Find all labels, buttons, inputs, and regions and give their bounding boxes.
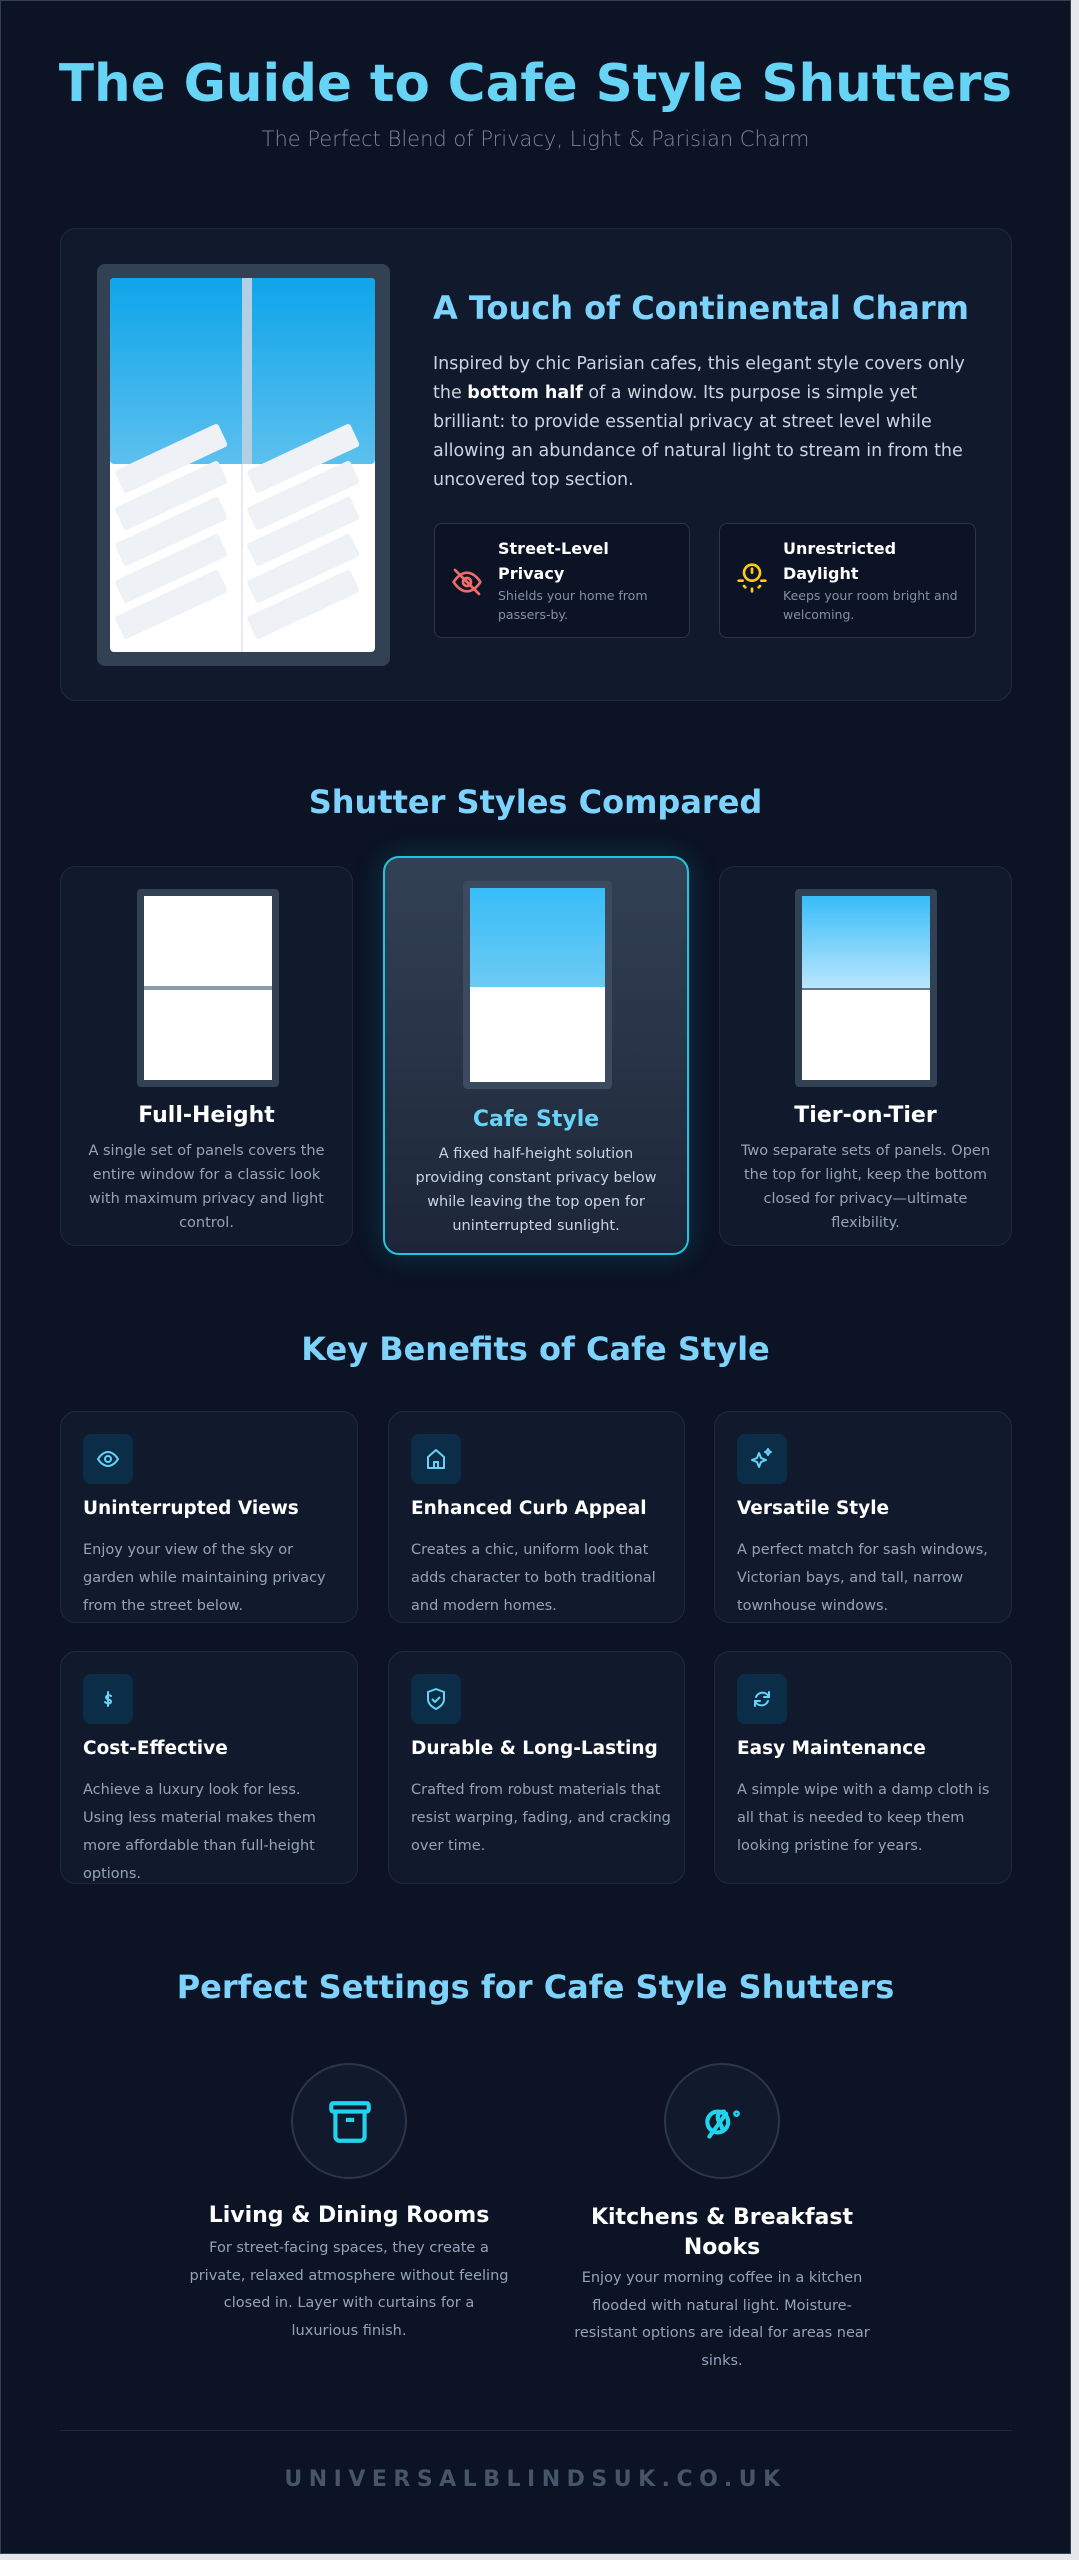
- setting: kitchens: Nooks: [684, 2235, 760, 2260]
- card: tier-on-tier: [719, 866, 1012, 1246]
- icon: refresh: [737, 1674, 787, 1724]
- feature: daylight: Keeps your room bright and: [783, 588, 958, 603]
- benefit: durable: Durable & Long-Lasting: [411, 1738, 658, 1759]
- benefit: curb appeal: [388, 1411, 685, 1623]
- feature: privacy: Street-Level: [498, 539, 609, 558]
- icon: eye off: [452, 568, 482, 596]
- icon: sparkles: [737, 1434, 787, 1484]
- feature: privacy: Privacy: [498, 564, 564, 583]
- icon: eye: [83, 1434, 133, 1484]
- setting: living & dining: [190, 2063, 508, 2338]
- benefit: uninterrupted views: Enjoy your view of the sky or garden while maintaining privacy from the street below.: [83, 1542, 326, 1614]
- benefit: versatile style: [714, 1411, 1012, 1623]
- card: full-height: [60, 866, 353, 1246]
- benefit: versatile style: A perfect match for sash windows, Victorian bays, and tall, narrow townhouse windows.: [737, 1542, 988, 1614]
- illustration: full-height window: [137, 889, 279, 1087]
- icon: coffee bean in circle: [664, 2063, 780, 2179]
- feature: daylight: Unrestricted: [783, 539, 896, 558]
- setting: kitchens: Enjoy your morning coffee in a kitchen flooded with natural light. Moisture-resistant options are ideal for areas near sinks.: [574, 2270, 870, 2368]
- benefit: cost-effective: Cost-Effective: [83, 1738, 228, 1759]
- benefit: durable: [388, 1651, 685, 1884]
- card: tier-on-tier: Tier-on-Tier: [794, 1103, 937, 1128]
- illustration: cafe window: [97, 264, 390, 666]
- card: cafe style (highlighted): A fixed half-height solution providing constant privacy below while leaving the top open for uninterrupted sunlight.: [416, 1146, 656, 1234]
- feature: privacy: [434, 523, 690, 638]
- heading: key benefits: Key Benefits of Cafe Style: [301, 1330, 770, 1368]
- icon: sun: [737, 563, 767, 593]
- card: full-height: Full-Height: [138, 1103, 275, 1128]
- setting: living & dining: For street-facing spaces, they create a private, relaxed atmosphere without feeling closed in. Layer with curtains for a luxurious finish.: [190, 2240, 508, 2338]
- title: The Guide to Cafe Style Shutters: [59, 54, 1012, 114]
- heading: continental charm: A Touch of Continental Charm: [433, 289, 969, 327]
- card: cafe style (highlighted): Cafe Style: [473, 1107, 599, 1132]
- setting: kitchens: [574, 2063, 870, 2368]
- heading: shutter styles compared: Shutter Styles Compared: [309, 783, 762, 821]
- icon: dollar: [83, 1674, 133, 1724]
- benefit: uninterrupted views: [60, 1411, 358, 1623]
- benefit: cost-effective: Achieve a luxury look for less. Using less material makes them more affordable than full-height options.: [83, 1782, 316, 1882]
- benefit: easy maintenance: Easy Maintenance: [737, 1738, 926, 1759]
- icon: storage box in circle: [291, 2063, 407, 2179]
- card: full-height: A single set of panels covers the entire window for a classic look with maximum privacy and light control.: [88, 1143, 325, 1231]
- feature: daylight: [719, 523, 976, 638]
- card: tier-on-tier: Two separate sets of panels. Open the top for light, keep the bottom closed for privacy—ultimate flexibility.: [741, 1143, 990, 1231]
- text: intro paragraph: Inspired by chic Parisian cafes, this elegant style covers only the bottom half of a window. Its purpose is simple yet brilliant: to provide essential privacy at street level while allowing an abundance of natural light to stream in from the uncovered top section.: [433, 354, 965, 490]
- benefit: cost-effective: [60, 1651, 358, 1884]
- benefit: easy maintenance: A simple wipe with a damp cloth is all that is needed to keep them looking pristine for years.: [737, 1782, 989, 1854]
- setting: kitchens: Kitchens & Breakfast: [591, 2205, 853, 2230]
- setting: living & dining: Living & Dining Rooms: [209, 2203, 489, 2228]
- icon: house: [411, 1434, 461, 1484]
- footer: website: UNIVERSALBLINDSUK.CO.UK: [284, 2467, 787, 2492]
- illustration: cafe window: [463, 881, 612, 1089]
- benefit: curb appeal: Creates a chic, uniform look that adds character to both traditional and modern homes.: [411, 1542, 656, 1614]
- illustration: tier window: [795, 889, 937, 1087]
- feature: daylight: Daylight: [783, 564, 858, 583]
- feature: privacy: Shields your home from: [498, 588, 648, 603]
- benefit: uninterrupted views: Uninterrupted Views: [83, 1498, 299, 1519]
- benefit: durable: Crafted from robust materials that resist warping, fading, and cracking over time.: [411, 1782, 671, 1854]
- feature: daylight: welcoming.: [783, 607, 854, 622]
- heading: perfect settings: Perfect Settings for Cafe Style Shutters: [177, 1968, 894, 2006]
- benefit: easy maintenance: [714, 1651, 1012, 1884]
- subtitle: The Perfect Blend of Privacy, Light & Parisian Charm: [262, 127, 809, 151]
- feature: privacy: passers-by.: [498, 607, 568, 622]
- benefit: versatile style: Versatile Style: [737, 1498, 889, 1519]
- panel: intro: [60, 228, 1012, 701]
- card: cafe style (highlighted): [383, 856, 689, 1255]
- icon: shield check: [411, 1674, 461, 1724]
- benefit: curb appeal: Enhanced Curb Appeal: [411, 1498, 647, 1519]
